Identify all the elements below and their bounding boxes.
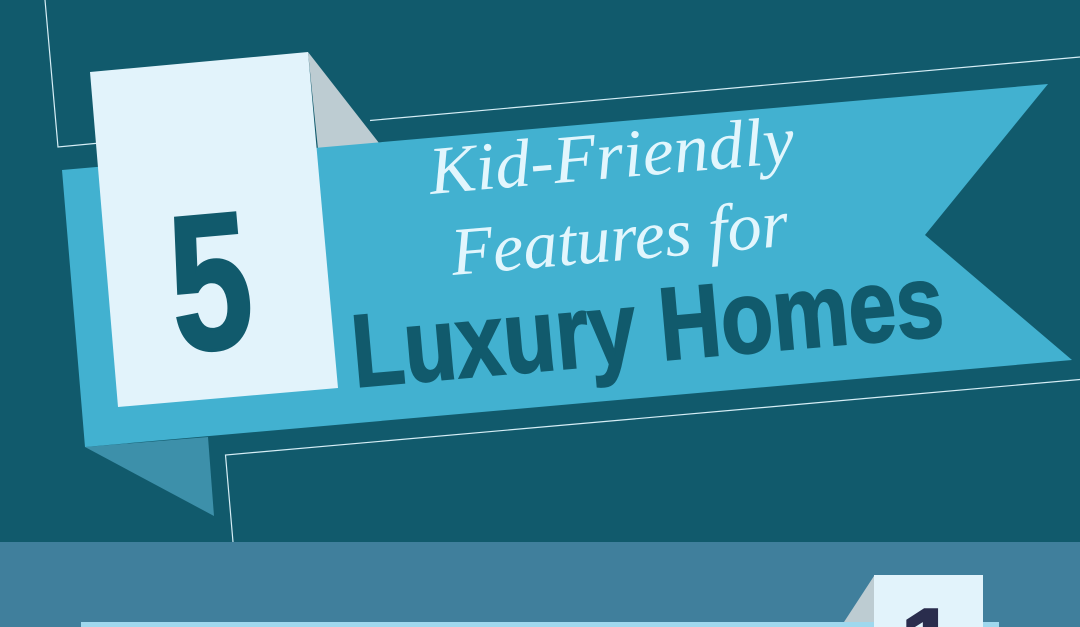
box fold bbox=[308, 52, 379, 149]
lower section band bbox=[0, 542, 1080, 627]
section one header bbox=[81, 575, 999, 627]
title line two: Features for bbox=[447, 185, 792, 290]
number box bbox=[90, 52, 338, 407]
ribbon fold under bbox=[85, 437, 214, 516]
title line one: Kid-Friendly bbox=[425, 101, 798, 209]
title line three: Luxury Homes bbox=[347, 243, 948, 409]
ribbon bbox=[62, 84, 1072, 447]
big number: 5 bbox=[161, 171, 260, 394]
title banner bbox=[62, 52, 1072, 516]
